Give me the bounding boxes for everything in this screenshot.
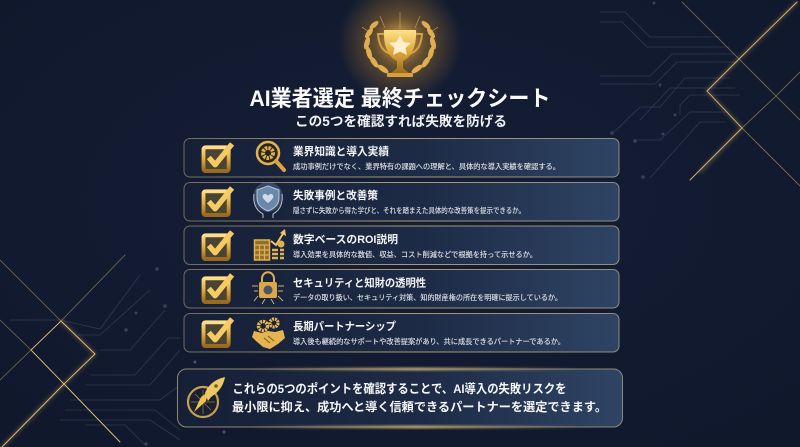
description: 導入後も継続的なサポートや改善提案があり、共に成長できるパートナーであるか。: [293, 337, 565, 346]
panel: セキュリティと知財の透明性: [184, 270, 619, 308]
panel: 長期パートナーシップ: [184, 314, 619, 352]
icon: checkbox: [203, 188, 232, 215]
icon: shield and hands: [253, 182, 283, 218]
panel: 失敗事例と改善策: [184, 182, 619, 221]
icon: calculator and chart: [254, 229, 286, 260]
heading: 業界知識と導入実績: [293, 145, 389, 158]
gold light lines bottom left: [0, 255, 125, 447]
panel: summary callout: 最小限に抑え、成功へと導く信頼できるパートナーを選定できます。: [232, 399, 607, 414]
icon: checkbox: [203, 232, 232, 259]
icon: padlock: [252, 272, 284, 304]
laurel right: [410, 20, 437, 75]
icon: checkbox: [203, 144, 232, 171]
circuit lines bottom left: [10, 267, 180, 446]
subtitle: この5つを確認すれば失敗を防げる: [295, 113, 507, 129]
heading: セキュリティと知財の透明性: [293, 276, 426, 290]
heading: 失敗事例と改善策: [293, 189, 378, 202]
description: 導入効果を具体的な数値、収益、コスト削減などで根拠を持って示せるか。: [293, 250, 537, 259]
icon: trophy with laurel: [338, 0, 462, 104]
laurel left: [363, 20, 390, 75]
circuit dots bottom centre: [194, 360, 226, 434]
circuit lines top right: [600, 2, 740, 179]
icon: gear and magnifier: [257, 142, 284, 170]
icon: compass and rocket: [188, 377, 225, 417]
heading: 数字ベースのROI説明: [293, 233, 398, 246]
icon: gears and handshake: [252, 319, 285, 349]
panel: 業界知識と導入実績: [184, 138, 619, 177]
title: AI業者選定 最終チェックシート: [250, 86, 550, 111]
heading: 長期パートナーシップ: [293, 320, 396, 333]
description: 成功事例だけでなく、業界特有の課題への理解と、具体的な導入実績を確認する。: [293, 162, 560, 171]
panel: summary callout: [178, 368, 622, 428]
icon: checkbox: [203, 319, 232, 346]
gold light lines top right: [682, 2, 800, 186]
summary text: これらの5つのポイントを確認することで、AI導入の失敗リスクを: [232, 381, 566, 396]
panel: 数字ベースのROI説明: [184, 226, 619, 264]
icon: checkbox: [203, 275, 232, 302]
description: 隠さずに失敗から得た学びと、それを踏まえた具体的な改善策を提示できるか。: [293, 206, 525, 215]
description: データの取り扱い、セキュリティ対策、知的財産権の所在を明確に提示しているか。: [293, 293, 562, 302]
